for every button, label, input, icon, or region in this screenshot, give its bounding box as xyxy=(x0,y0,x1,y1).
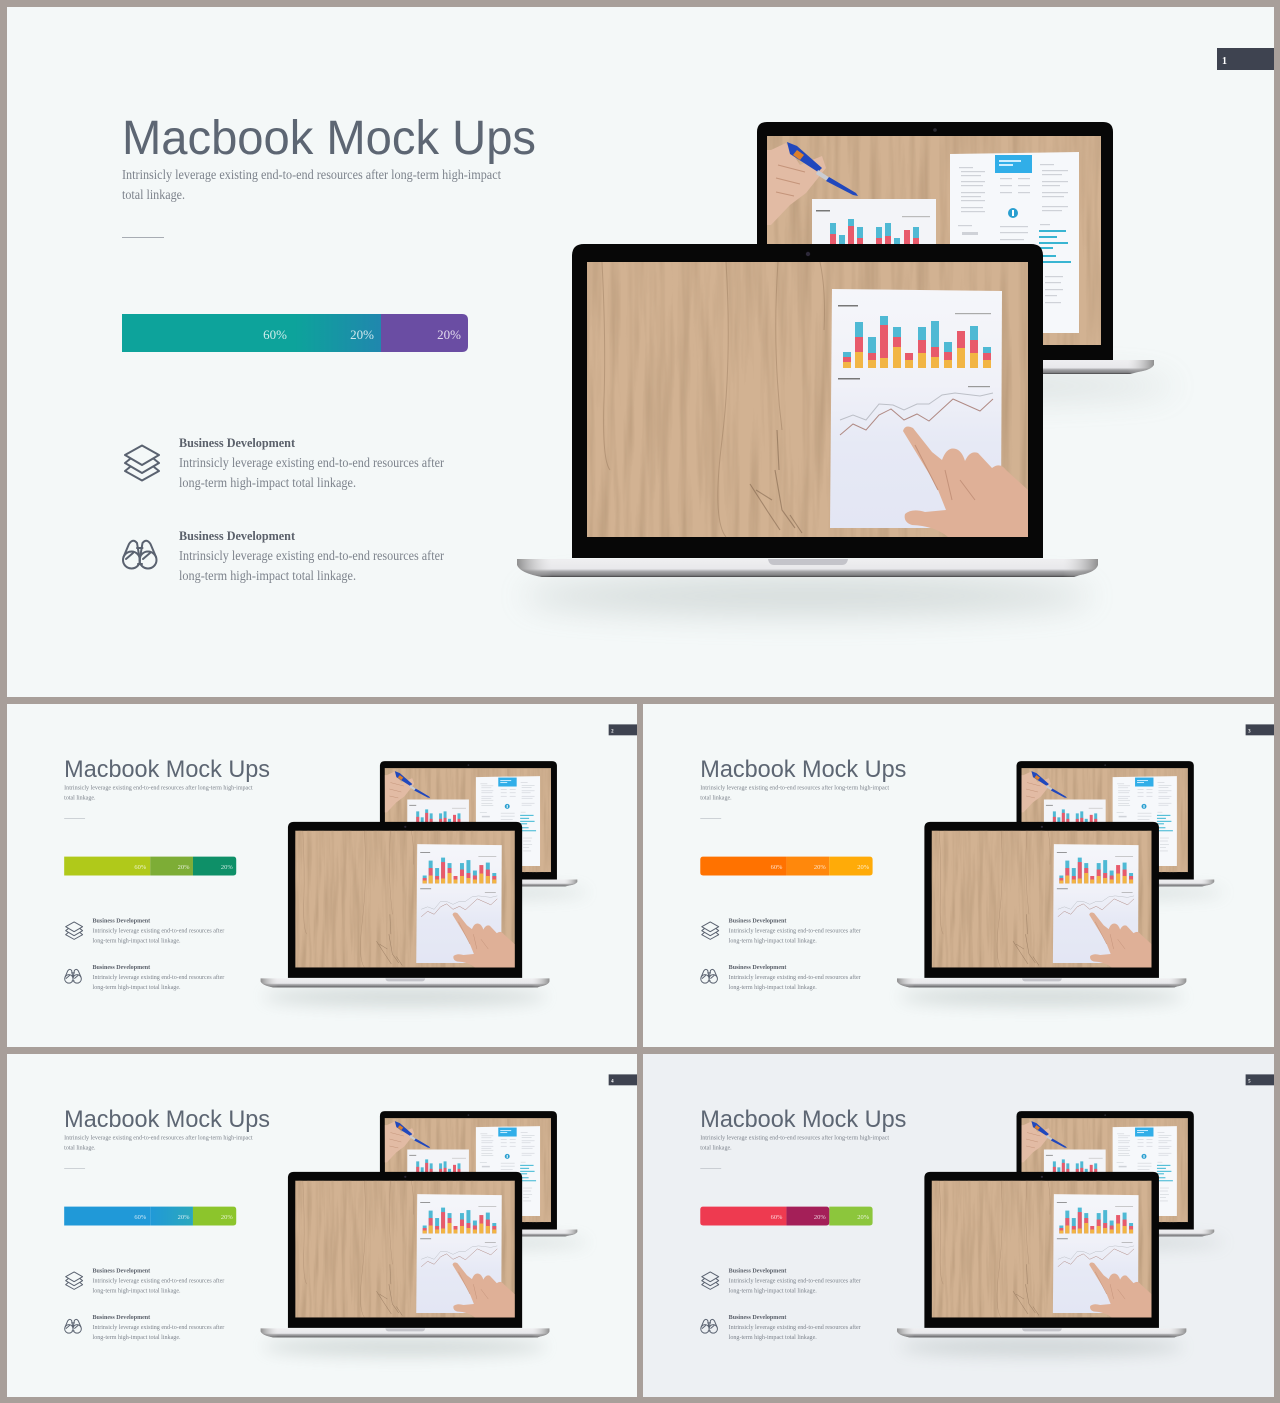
stacked percentage bar: 20% xyxy=(814,864,826,871)
subtitle: Intrinsicly leverage existing end-to-end resources after long-term high-impact xyxy=(122,167,501,182)
subtitle: total linkage. xyxy=(64,1144,96,1151)
stacked percentage bar: 60% xyxy=(263,327,287,342)
subtitle: Intrinsicly leverage existing end-to-end resources after long-term high-impact xyxy=(64,785,253,792)
icon: binoculars xyxy=(65,969,81,983)
stacked percentage bar: 20% xyxy=(221,1214,233,1221)
text block: business development 2: Intrinsicly leverage existing end-to-end resources after xyxy=(729,1324,861,1331)
back laptop xyxy=(360,761,588,898)
icon: layers xyxy=(66,1272,83,1289)
subtitle: total linkage. xyxy=(64,794,96,801)
stacked percentage bar: 20% xyxy=(857,864,870,871)
icon: binoculars xyxy=(65,1319,81,1333)
text block: business development 2 xyxy=(93,1314,225,1341)
text block: business development 1: Intrinsicly leverage existing end-to-end resources after xyxy=(179,455,444,470)
text block: business development 1 xyxy=(729,918,861,945)
text block: business development 2: Intrinsicly leverage existing end-to-end resources after xyxy=(179,548,444,563)
stacked percentage bar xyxy=(64,1207,236,1226)
subtitle xyxy=(700,1135,889,1151)
subtitle: total linkage. xyxy=(700,794,732,801)
subtitle xyxy=(64,785,253,801)
front laptop xyxy=(261,822,549,1006)
page tag xyxy=(1246,1074,1274,1085)
text block: business development 2: Business Development xyxy=(729,964,787,971)
stacked percentage bar xyxy=(64,857,236,876)
page tag: 1 xyxy=(1222,56,1227,67)
panel: slide 3 orange xyxy=(643,704,1274,1047)
text block: business development 1: long-term high-impact total linkage. xyxy=(179,475,356,490)
icon: binoculars xyxy=(701,969,717,983)
stacked percentage bar: 60% xyxy=(134,864,147,871)
text block: business development 1: Business Development xyxy=(729,1268,787,1275)
stacked percentage bar: 60% xyxy=(771,1214,783,1221)
page tag xyxy=(1217,48,1274,70)
stacked percentage bar xyxy=(122,314,468,352)
front laptop xyxy=(897,822,1186,1006)
text block: business development 2: Business Development xyxy=(93,964,151,971)
stacked percentage bar: 20% xyxy=(437,327,461,342)
text block: business development 2: long-term high-impact total linkage. xyxy=(93,1334,181,1341)
text block: business development 1: Intrinsicly leverage existing end-to-end resources after xyxy=(729,1278,861,1285)
title: Macbook Mock Ups xyxy=(122,112,536,165)
front laptop xyxy=(517,244,1098,614)
subtitle: Intrinsicly leverage existing end-to-end resources after long-term high-impact xyxy=(700,1135,889,1141)
stacked percentage bar xyxy=(700,1207,873,1226)
title: Macbook Mock Ups xyxy=(700,756,907,783)
page tag xyxy=(1246,724,1274,735)
title: Macbook Mock Ups xyxy=(64,756,270,783)
text block: business development 2: long-term high-impact total linkage. xyxy=(729,1334,817,1341)
text block: business development 1 xyxy=(729,1268,861,1295)
text block: business development 2: Intrinsicly leverage existing end-to-end resources after xyxy=(93,1324,225,1331)
text block: business development 2: long-term high-impact total linkage. xyxy=(729,984,817,991)
stacked percentage bar: 20% xyxy=(814,1214,826,1221)
page tag xyxy=(609,1074,637,1085)
icon: binoculars xyxy=(123,541,156,568)
text block: business development 1: long-term high-impact total linkage. xyxy=(93,1288,181,1295)
back laptop xyxy=(360,1111,588,1248)
page tag: 5 xyxy=(1248,1079,1251,1084)
text block: business development 1 xyxy=(179,435,444,490)
stacked percentage bar: 20% xyxy=(221,864,233,871)
text block: business development 2 xyxy=(729,964,861,991)
back laptop xyxy=(716,122,1175,398)
page tag: 4 xyxy=(611,1079,614,1084)
text block: business development 1: long-term high-impact total linkage. xyxy=(729,938,817,945)
text block: business development 1: Business Development xyxy=(93,1268,151,1275)
text block: business development 2: Intrinsicly leverage existing end-to-end resources after xyxy=(729,974,861,981)
stacked percentage bar: 60% xyxy=(771,864,783,871)
panel: slide 4 blue xyxy=(7,1054,637,1397)
text block: business development 2: Business Development xyxy=(93,1314,151,1321)
icon: binoculars xyxy=(701,1319,717,1333)
front laptop xyxy=(897,1172,1186,1356)
text block: business development 1 xyxy=(93,1268,225,1295)
subtitle xyxy=(122,167,501,202)
stacked percentage bar: 20% xyxy=(178,864,190,871)
back laptop xyxy=(996,1111,1225,1248)
panel: slide 2 green xyxy=(7,704,637,1047)
text block: business development 2: long-term high-impact total linkage. xyxy=(93,984,181,991)
text block: business development 1: Intrinsicly leverage existing end-to-end resources after xyxy=(93,928,225,935)
back laptop xyxy=(996,761,1225,898)
text block: business development 1: Intrinsicly leverage existing end-to-end resources after xyxy=(729,928,861,935)
text block: business development 1: Intrinsicly leverage existing end-to-end resources after xyxy=(93,1278,225,1285)
icon: layers xyxy=(125,446,159,480)
page tag: 2 xyxy=(611,729,614,734)
panel: slide 5 red xyxy=(643,1054,1274,1397)
text block: business development 1 xyxy=(93,918,225,945)
page tag: 3 xyxy=(1248,729,1251,734)
subtitle: Intrinsicly leverage existing end-to-end resources after long-term high-impact xyxy=(64,1135,253,1142)
icon: layers xyxy=(702,1272,719,1289)
text block: business development 2 xyxy=(179,528,444,583)
subtitle xyxy=(64,1135,253,1151)
title: Macbook Mock Ups xyxy=(64,1106,270,1133)
title: Macbook Mock Ups xyxy=(700,1106,907,1133)
subtitle: total linkage. xyxy=(122,187,185,202)
icon: layers xyxy=(66,922,83,939)
subtitle: total linkage. xyxy=(700,1144,732,1151)
subtitle xyxy=(700,785,889,801)
text block: business development 2: Business Development xyxy=(179,528,296,543)
front laptop xyxy=(261,1172,549,1356)
subtitle: Intrinsicly leverage existing end-to-end resources after long-term high-impact xyxy=(700,785,889,791)
stacked percentage bar xyxy=(700,857,873,876)
text block: business development 2 xyxy=(93,964,225,991)
text block: business development 1: Business Development xyxy=(729,918,787,925)
stacked percentage bar: 20% xyxy=(857,1214,870,1221)
stacked percentage bar: 60% xyxy=(134,1214,147,1221)
text block: business development 2: Intrinsicly leverage existing end-to-end resources after xyxy=(93,974,225,981)
text block: business development 2: long-term high-impact total linkage. xyxy=(179,568,356,583)
text block: business development 1: Business Development xyxy=(93,918,151,925)
text block: business development 2 xyxy=(729,1314,861,1341)
page tag xyxy=(609,724,637,735)
panel: slide 1 teal purple xyxy=(7,7,1274,697)
text block: business development 1: Business Development xyxy=(179,435,296,450)
text block: business development 1: long-term high-impact total linkage. xyxy=(93,938,181,945)
stacked percentage bar: 20% xyxy=(178,1214,190,1221)
text block: business development 2: Business Development xyxy=(729,1314,787,1321)
text block: business development 1: long-term high-impact total linkage. xyxy=(729,1288,817,1295)
stacked percentage bar: 20% xyxy=(350,327,374,342)
icon: layers xyxy=(702,922,719,939)
